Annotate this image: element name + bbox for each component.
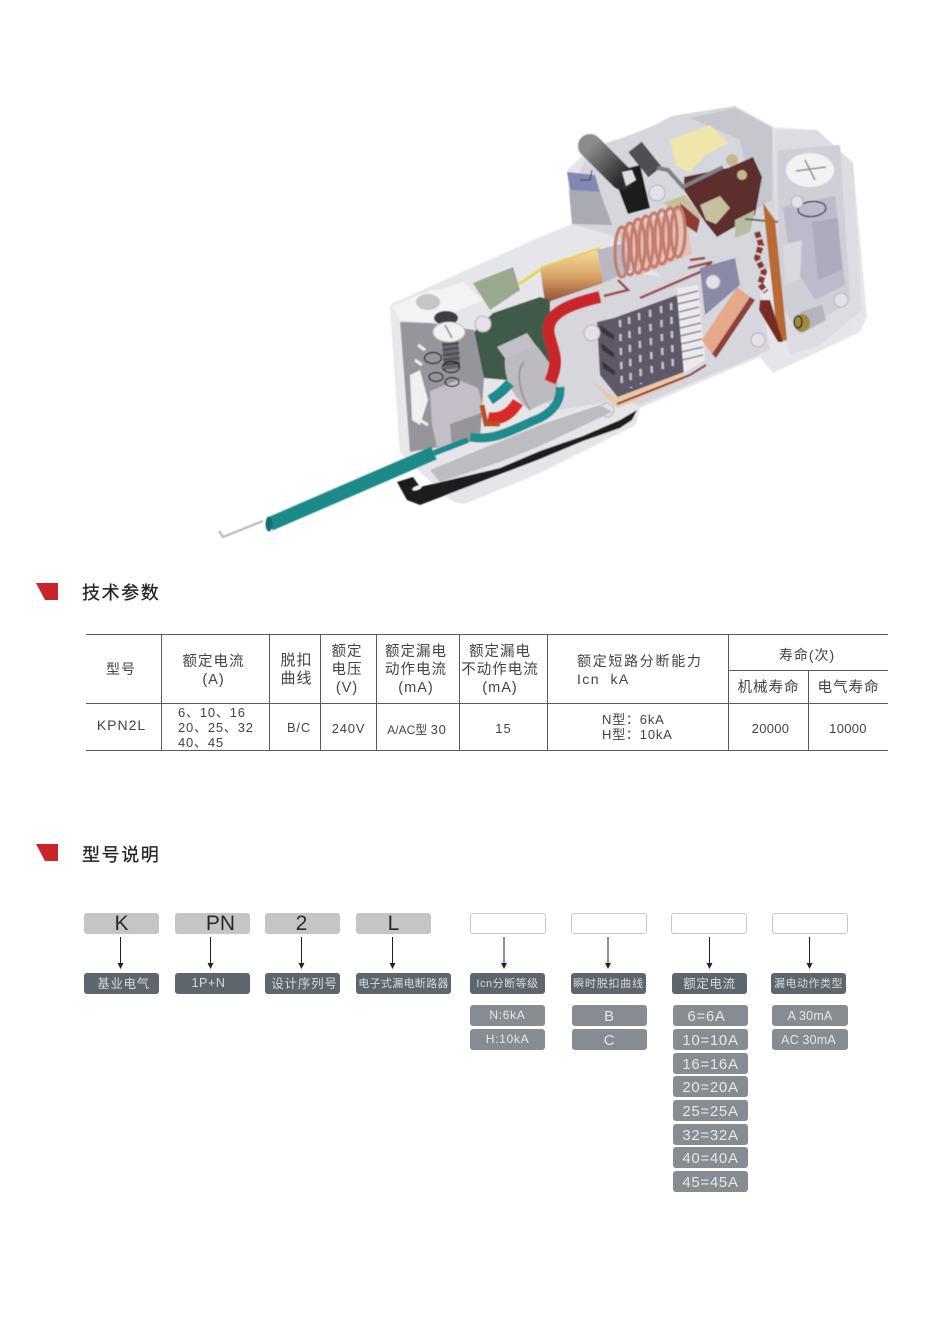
header: 脱扣曲线: 曲线 [280,670,312,687]
mid cavity [540,270,770,410]
header: 机械寿命: 机械寿命 [738,680,800,696]
label: 基业电气 [84,973,159,994]
header: 额定漏电动作电流: (mA) [398,680,434,696]
header: 额定漏电动作电流: 额定漏电 [385,644,447,660]
header: 额定短路分断能力: Icn kA [577,671,630,687]
label: 漏电动作类型: 漏电动作类型 [774,978,843,990]
code box: PN [175,913,250,934]
header: 额定电压: (V) [336,680,358,696]
marker ring right [797,200,827,218]
blue-purple backing [700,258,740,315]
label: 1P+N [175,973,250,994]
option: 20=20A [673,1076,748,1097]
option: 20=20A: 20=20A [682,1079,739,1096]
option: 32=32A [673,1124,748,1145]
black rail [397,410,637,505]
translucent slider [430,405,612,482]
solenoid [506,243,632,303]
arrows [118,937,812,969]
cell: A/AC型 30: A/AC型 30 [387,722,447,737]
description labels [84,973,846,994]
label: 1P+N: 1P+N [191,976,226,990]
options: curve [572,1005,647,1050]
option: 25=25A: 25=25A [682,1103,739,1120]
label: 瞬时脱扣曲线 [571,973,646,994]
header: 额定漏电不动作电流: 不动作电流 [461,662,539,678]
option: H:10kA: H:10kA [486,1032,529,1046]
pale rivets [584,185,848,417]
header: 脱扣曲线 [280,652,312,687]
option: 16=16A [673,1053,748,1074]
option: 45=45A: 45=45A [682,1174,739,1191]
header: 额定漏电动作电流 [385,643,447,696]
label: 额定电流 [672,973,747,994]
cell: current ratings: 20、25、32 [178,720,254,735]
header: 额定电流: 额定电流 [182,654,244,670]
option: C: C [604,1032,615,1049]
section marker: 型号说明 [36,844,58,861]
code box: L [356,913,431,934]
header: 型号: 型号 [106,661,136,677]
illustration: cutaway view of the circuit breaker [218,106,867,539]
header: 额定电压 [332,643,362,696]
option: AC 30mA: AC 30mA [781,1033,836,1047]
empty box: leakage type [772,913,848,934]
brass screw [794,305,826,332]
header: 额定漏电不动作电流: 额定漏电 [469,644,531,660]
label: Icn分断等级: Icn分断等级 [476,978,539,990]
header: 脱扣曲线: 脱扣 [280,652,312,669]
header: 额定漏电不动作电流 [461,643,539,696]
option: 40=40A: 40=40A [682,1150,739,1167]
header: 额定短路分断能力 [577,653,703,687]
header: 额定电流 [182,653,244,688]
option: 16=16A: 16=16A [682,1056,739,1073]
option: 40=40A [673,1147,748,1168]
option: AC 30mA [772,1029,848,1050]
PCB [473,297,550,388]
copper plate [702,287,750,354]
cell: breaking capacity: H型：10kA [602,727,673,742]
teal wires [270,383,560,524]
option: 32=32A: 32=32A [682,1127,739,1144]
label: 设计序列号: 设计序列号 [271,977,338,991]
option: N:6kA [470,1005,545,1026]
empty box: curve [571,913,647,934]
header: 额定漏电动作电流: 动作电流 [385,662,447,678]
option: 6=6A [673,1005,748,1026]
label: Icn分断等级 [470,973,545,994]
options: leakage type [772,1005,848,1050]
grey wire [657,167,723,187]
small hole in rail [412,484,422,492]
label: 瞬时脱扣曲线: 瞬时脱扣曲线 [573,978,644,990]
option: A 30mA: A 30mA [788,1009,832,1023]
header: 额定电压: 电压 [332,662,362,678]
option: B [572,1005,647,1026]
twisted wire [757,232,766,292]
option: 6=6A: 6=6A [687,1008,726,1025]
marker rings left [424,352,460,386]
black cylinders [590,146,655,214]
front rivet [475,316,491,332]
cell: breaking capacity: N型：6kA [602,712,665,727]
housing: translucent body [390,106,867,503]
cell: B/C: B/C [287,720,311,735]
cell: 10000: 10000 [829,721,867,736]
empty box: current [671,913,747,934]
option: 10=10A: 10=10A [682,1032,739,1049]
housing: upper shell [572,106,776,300]
left screw [433,322,465,370]
option: H:10kA [470,1029,545,1050]
option: 45=45A [673,1171,748,1192]
code box: K: K [114,912,128,935]
label: 基业电气: 基业电气 [97,977,150,991]
mechanism plate [684,157,762,237]
cream part [670,125,728,172]
cell: 240V: 240V [332,721,365,736]
header: 额定短路分断能力: 额定短路分断能力 [577,653,703,669]
front face [392,282,484,452]
red wire [548,297,600,382]
option: B: B [604,1008,615,1025]
copper coil [615,203,700,277]
heading: 技术参数: 技术参数 [82,583,160,603]
stripped wire tip [219,521,263,537]
brown bar [763,203,787,342]
header: 电气寿命: 电气寿命 [818,680,880,696]
cell: breaking capacity [602,712,673,742]
cell: 20000: 20000 [752,721,789,736]
header: 寿命(次): 寿命(次) [779,647,835,663]
label: 漏电动作类型 [771,973,846,994]
code box: K [84,913,159,934]
cell: current ratings [178,705,254,750]
code box: 2: 2 [296,912,307,935]
right terminal [783,153,845,300]
label: 设计序列号 [265,973,340,994]
label: 电子式漏电断路器 [356,973,451,994]
cell: 15: 15 [495,721,512,736]
table: technical parameters [86,634,888,751]
option: N:6kA: N:6kA [489,1008,526,1022]
option: 10=10A [673,1029,748,1050]
terminal block [430,380,484,452]
heading: 型号说明: 型号说明 [82,845,160,865]
option: 25=25A [673,1100,748,1121]
cell: KPN2L: KPN2L [97,717,146,733]
empty box: Icn [470,913,546,934]
label: 电子式漏电断路器: 电子式漏电断路器 [358,978,449,990]
option: A 30mA [772,1005,848,1026]
cell: current ratings: 40、45 [178,735,224,750]
header: 额定漏电不动作电流: (mA) [482,680,518,696]
options: rated current [673,1005,748,1192]
housing: right end [775,130,862,355]
code box: L: L [388,912,399,935]
code box: PN: PN [206,912,235,935]
header: 额定电压: 额定 [332,644,362,660]
model code boxes [84,912,848,935]
option: C [572,1029,647,1050]
label: 额定电流: 额定电流 [683,977,736,991]
header: 额定电流: (A) [202,672,225,688]
code box: 2 [265,913,340,934]
cell: current ratings: 6、10、16 [178,705,246,720]
section marker: 技术参数 [36,583,58,600]
toroid [497,333,560,410]
blue terminal block [567,170,612,225]
options: Icn [470,1005,545,1050]
arc chute [590,285,706,408]
